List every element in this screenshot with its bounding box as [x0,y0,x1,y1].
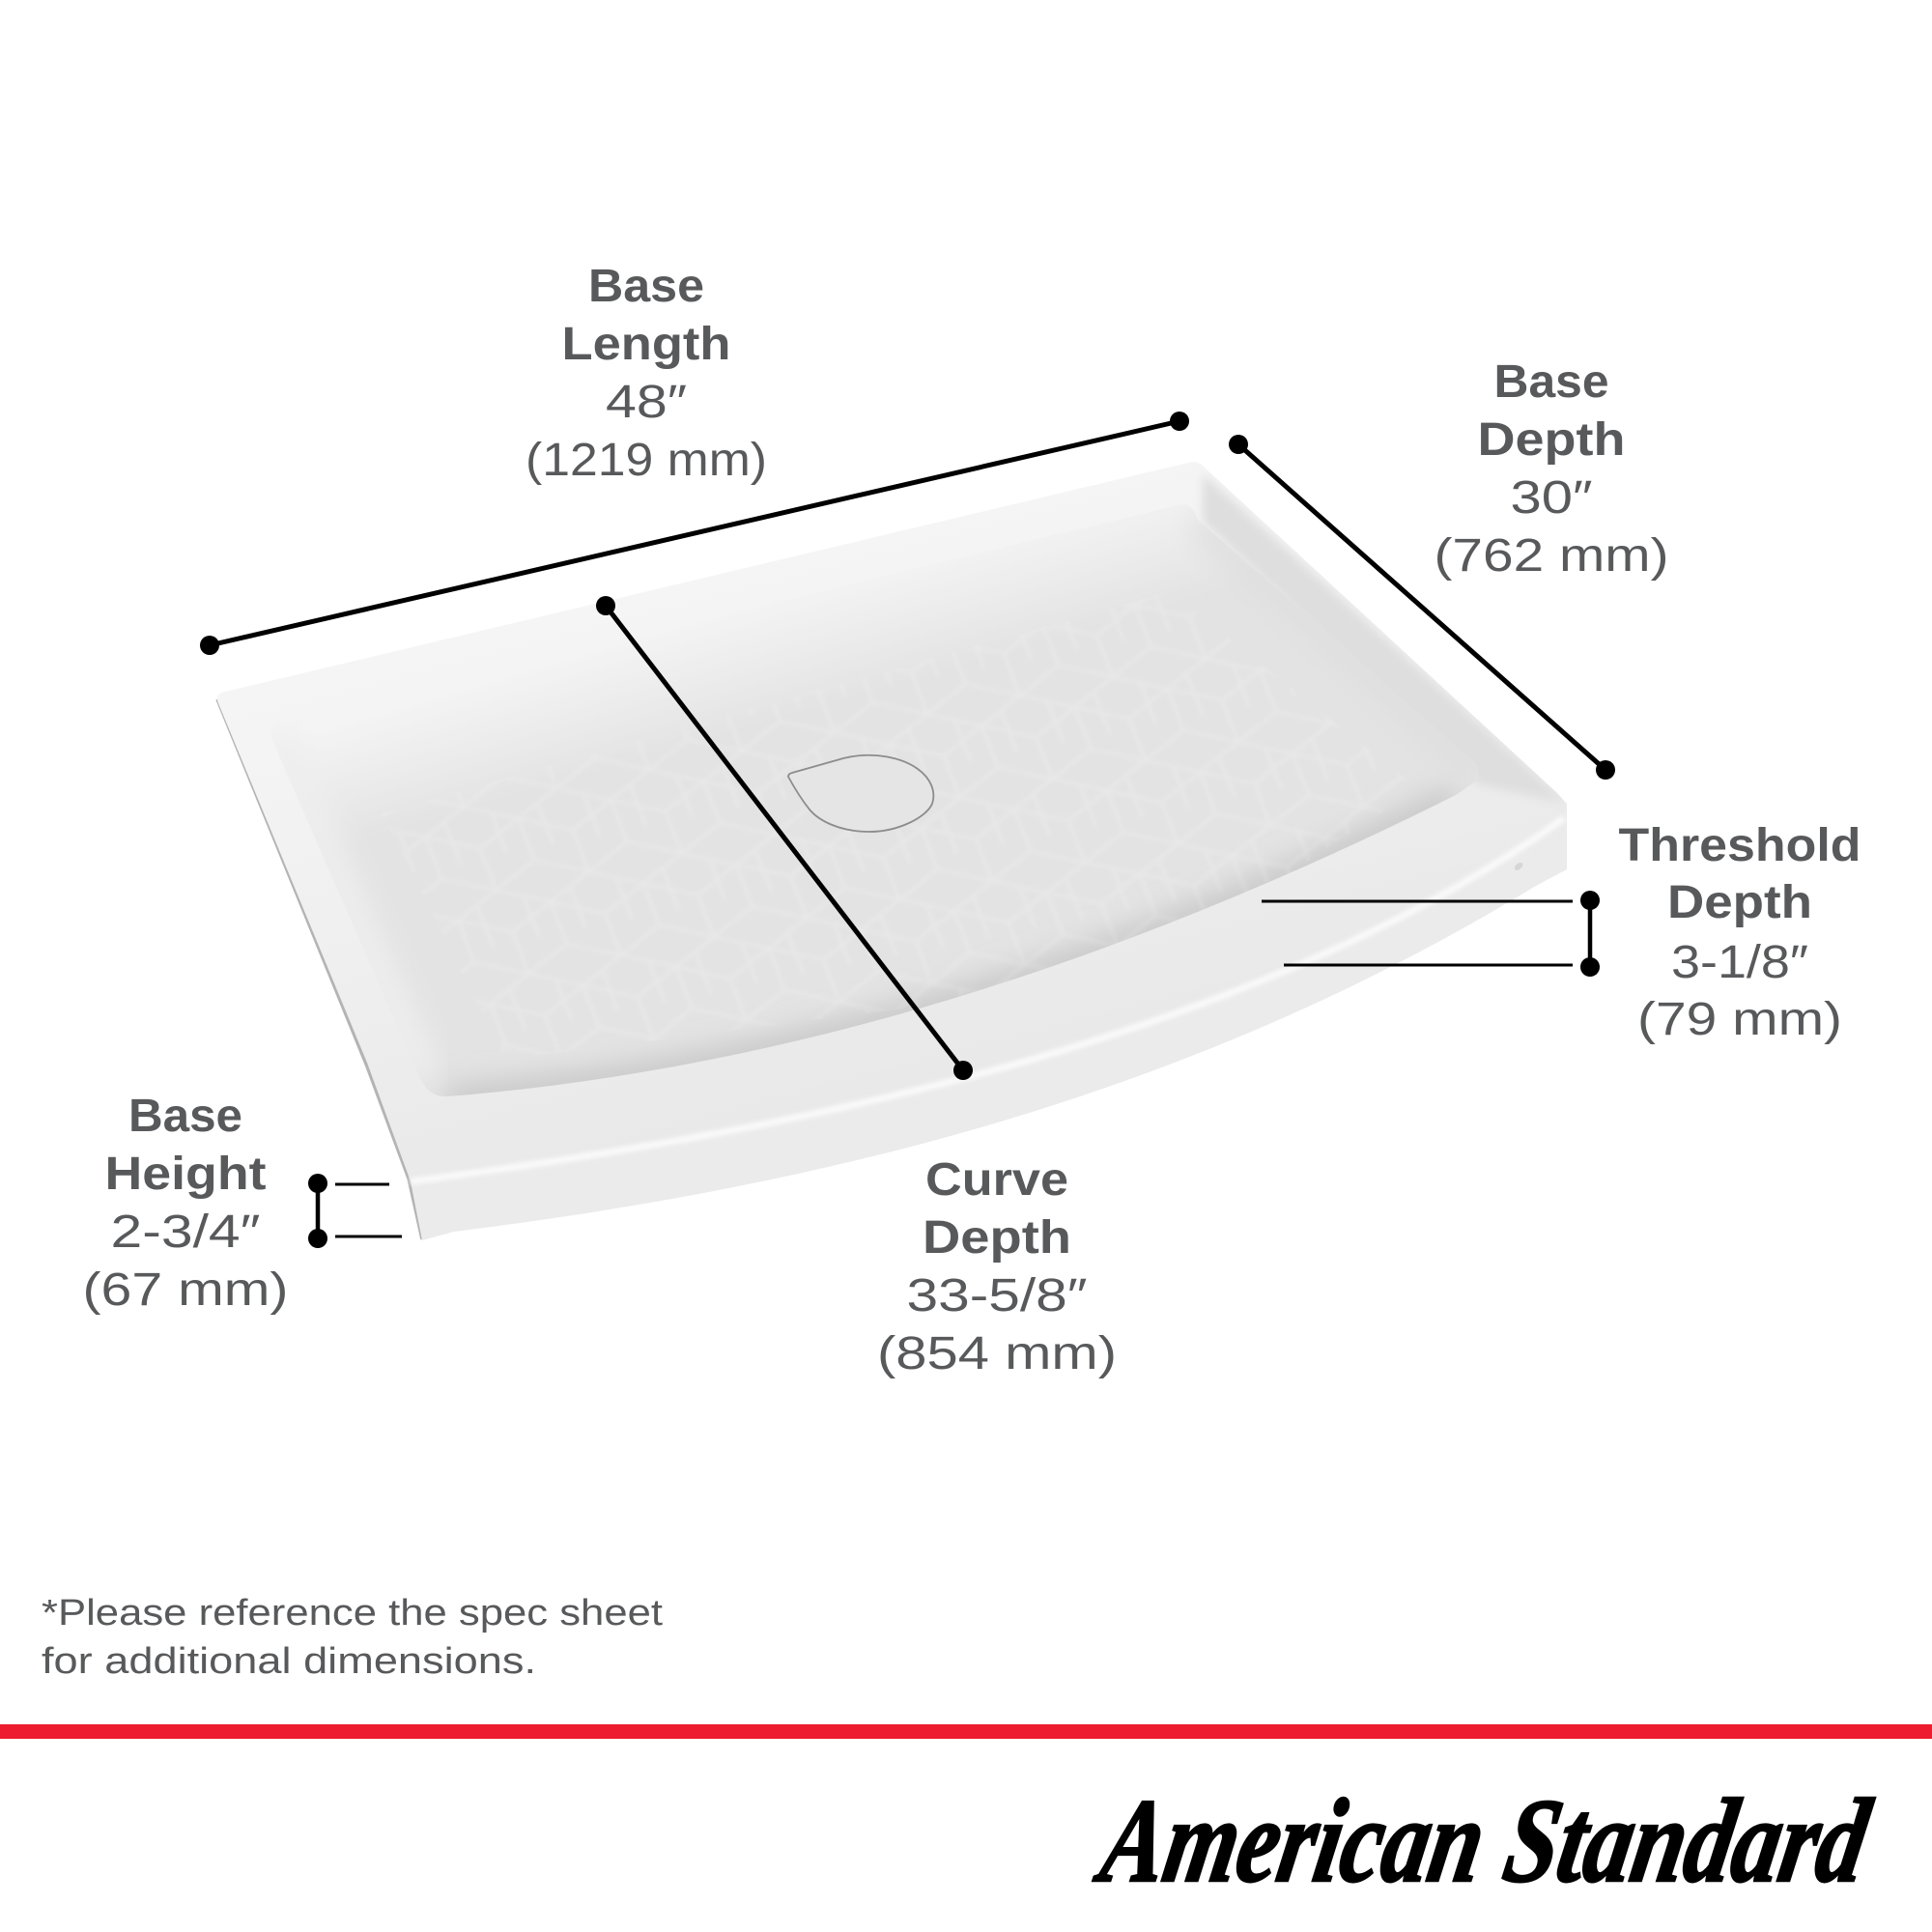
shower base tray illustration [217,462,1567,1240]
label: base depth: 30″ [1511,472,1592,524]
label: curve depth: Depth [923,1212,1071,1264]
label: threshold depth: Depth [1667,877,1812,928]
threshold overflow hole [1513,861,1524,872]
recessed basin [270,504,1497,1101]
brand logo: American [1088,1776,1494,1908]
basin left wall light [320,844,421,1061]
label: curve depth: (854 mm) [877,1328,1117,1379]
label: curve depth: 33-5/8″ [906,1270,1088,1321]
right rim band [1203,473,1567,804]
dimension line: base depth [1229,435,1615,780]
basin front wall shading [447,800,1456,1101]
label: base depth: Depth [1478,414,1625,466]
label: base depth: Base [1493,356,1609,408]
footnote [42,1593,664,1682]
slip resistant texture [290,560,1497,1101]
label: threshold depth: (79 mm) [1637,994,1842,1045]
footnote: *Please reference the spec sheet [42,1593,664,1634]
label: base depth: (762 mm) [1434,530,1669,582]
label: base height: (67 mm) [83,1264,288,1316]
tray left side shadow edge [217,699,422,1239]
label: base length: Base [588,261,704,312]
label: base length: (1219 mm) [526,435,767,486]
label: threshold depth: 3-1/8″ [1671,937,1808,988]
brand logo [1088,1776,1879,1908]
basin right wall shading [1206,528,1221,543]
dimension marker: base height [308,1174,402,1248]
label: base depth [1434,356,1669,582]
tray top surface [217,462,1567,1181]
label: curve depth: Curve [925,1154,1068,1206]
label: base height: Base [128,1091,242,1142]
red divider bar [0,1724,1932,1739]
label: base length: Length [562,319,730,370]
dimension line: base length [200,412,1189,655]
tray front face [411,804,1567,1240]
label: base height: Height [104,1149,267,1200]
drain cover [788,755,933,832]
label: threshold depth [1619,820,1861,1045]
dimension line: curve depth [596,596,973,1080]
label: curve depth [877,1154,1117,1379]
label: base height [83,1091,288,1316]
label: base length [526,261,767,486]
label: base height: 2-3/4″ [110,1207,261,1258]
label: threshold depth: Threshold [1619,820,1861,871]
footnote: for additional dimensions. [42,1641,536,1682]
dimension marker: threshold depth [1262,891,1600,977]
label: base length: 48″ [606,377,687,428]
front ledge highlight [411,818,1564,1181]
